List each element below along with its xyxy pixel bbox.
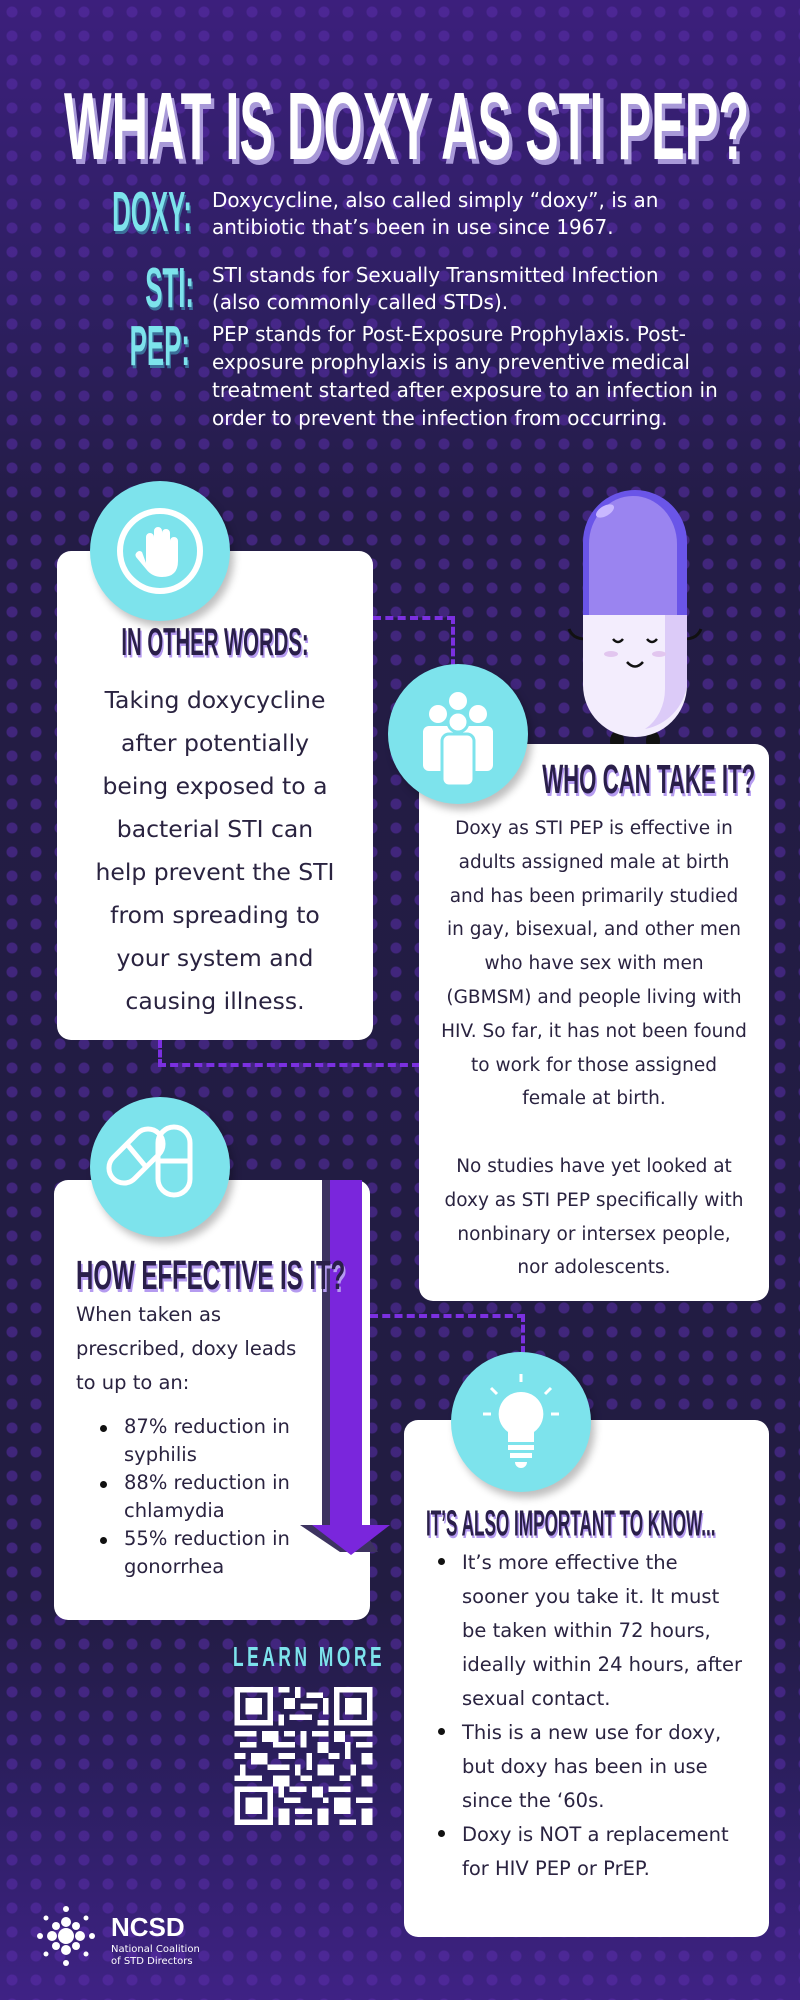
def label: STI: STI: [145, 257, 194, 320]
def text: PEP [212, 322, 718, 430]
text: who can take it: to work for those assigned [471, 1055, 717, 1076]
list: important points: ideally within 24 hours, after [462, 1653, 742, 1676]
heading: in other words: IN OTHER WORDS: [121, 621, 309, 664]
def text: PEP: PEP stands for Post-Exposure Prophylaxis. Post- [212, 322, 686, 346]
def text: DOXY: antibiotic that’s been in use since 1967. [212, 215, 614, 239]
logo: NCSD [37, 1906, 200, 1967]
logo: NCSD: NCSD [111, 1912, 185, 1942]
list: reductions: syphilis [124, 1443, 197, 1466]
list: reductions: 55% reduction in [124, 1527, 290, 1550]
text: who can take it: nonbinary or intersex people, [457, 1224, 731, 1245]
list: reductions: chlamydia [124, 1499, 225, 1522]
logo: NCSD: National Coalition [111, 1944, 200, 1955]
list: important points: sooner you take it. It must [462, 1585, 719, 1608]
text: in other words: help prevent the STI [96, 858, 334, 886]
text: who can take it: nor adolescents. [517, 1257, 671, 1278]
panel: who can take it [419, 744, 769, 1301]
panel: in other words [57, 551, 373, 1040]
text: who can take it: HIV. So far, it has not been found [441, 1021, 747, 1042]
list: important points: Doxy is NOT a replacement [462, 1823, 729, 1846]
text: in other words [96, 686, 334, 1015]
def text: PEP: order to prevent the infection from occurring. [212, 406, 668, 430]
def text: PEP: treatment started after exposure to an infection in [212, 378, 718, 402]
text: in other words: after potentially [121, 729, 309, 757]
icon: people [388, 664, 528, 804]
panel: how effective [54, 1180, 370, 1620]
list: important points: It’s more effective the [462, 1551, 678, 1574]
list: important points: for HIV PEP or PrEP. [462, 1857, 650, 1880]
text: who can take it: (GBMSM) and people living with [446, 987, 742, 1008]
text: who can take it: who have sex with men [484, 953, 704, 974]
text: how effective: prescribed, doxy leads [76, 1337, 296, 1360]
icon: lightbulb [451, 1352, 591, 1492]
text: who can take it: and has been primarily studied [450, 886, 738, 907]
icon: pill character [568, 490, 702, 744]
list: reductions [100, 1415, 290, 1578]
def label: DOXY: DOXY: [112, 181, 192, 244]
def text: DOXY [212, 188, 658, 239]
list: important points: be taken within 72 hours, [462, 1619, 711, 1642]
text: in other words: Taking doxycycline [105, 686, 325, 714]
list: reductions: 87% reduction in [124, 1415, 290, 1438]
text: who can take it [441, 818, 747, 1278]
learn more heading: LEARN MORE [233, 1642, 385, 1673]
icon: hand [90, 481, 230, 621]
icon: pills [90, 1097, 230, 1237]
dashed connector 2 [158, 1040, 420, 1067]
list: important points: but doxy has been in use [462, 1755, 708, 1778]
list: reductions: gonorrhea [124, 1555, 224, 1578]
def label: PEP: PEP: [130, 315, 190, 378]
text: who can take it: adults assigned male at birth [459, 852, 729, 873]
definitions [112, 181, 718, 430]
arrow: down [300, 1180, 390, 1555]
def text: STI: STI stands for Sexually Transmitted Infection [212, 263, 659, 287]
heading: who can take it: WHO CAN TAKE IT? [542, 758, 755, 803]
heading: also important: IT’S ALSO IMPORTANT TO KNOW... [426, 1502, 715, 1544]
dashed connector 1 [373, 616, 455, 678]
QR code [234, 1687, 372, 1825]
text: how effective: When taken as [76, 1303, 221, 1326]
list: important points: This is a new use for doxy, [462, 1721, 721, 1744]
logo: NCSD: of STD Directors [111, 1956, 193, 1967]
text: who can take it: No studies have yet looked at [456, 1156, 732, 1177]
text: how effective [76, 1303, 296, 1394]
list: important points: sexual contact. [462, 1687, 610, 1710]
text: who can take it: female at birth. [522, 1088, 666, 1109]
heading: how effective: HOW EFFECTIVE IS IT? [76, 1254, 345, 1299]
text: who can take it: in gay, bisexual, and other men [447, 919, 741, 940]
def text: PEP: exposure prophylaxis is any preventive medical [212, 350, 690, 374]
text: how effective: to up to an: [76, 1371, 189, 1394]
def text: DOXY: Doxycycline, also called simply “doxy”, is an [212, 188, 658, 212]
text: in other words: bacterial STI can [117, 815, 313, 843]
text: who can take it: Doxy as STI PEP is effective in [455, 818, 733, 839]
text: in other words: your system and [117, 944, 313, 972]
text: in other words: causing illness. [125, 987, 305, 1015]
list: important points: since the ‘60s. [462, 1789, 604, 1812]
text: in other words: from spreading to [110, 901, 320, 929]
def text: STI: (also commonly called STDs). [212, 290, 508, 314]
list: reductions: 88% reduction in [124, 1471, 290, 1494]
text: in other words: being exposed to a [102, 772, 327, 800]
text: who can take it: doxy as STI PEP specifically with [444, 1190, 743, 1211]
title: WHAT IS DOXY AS STI PEP? [64, 73, 749, 180]
list: important points [438, 1551, 742, 1880]
panel: also important [404, 1420, 769, 1937]
def text: STI [212, 263, 659, 314]
dashed connector 3 [370, 1314, 525, 1354]
